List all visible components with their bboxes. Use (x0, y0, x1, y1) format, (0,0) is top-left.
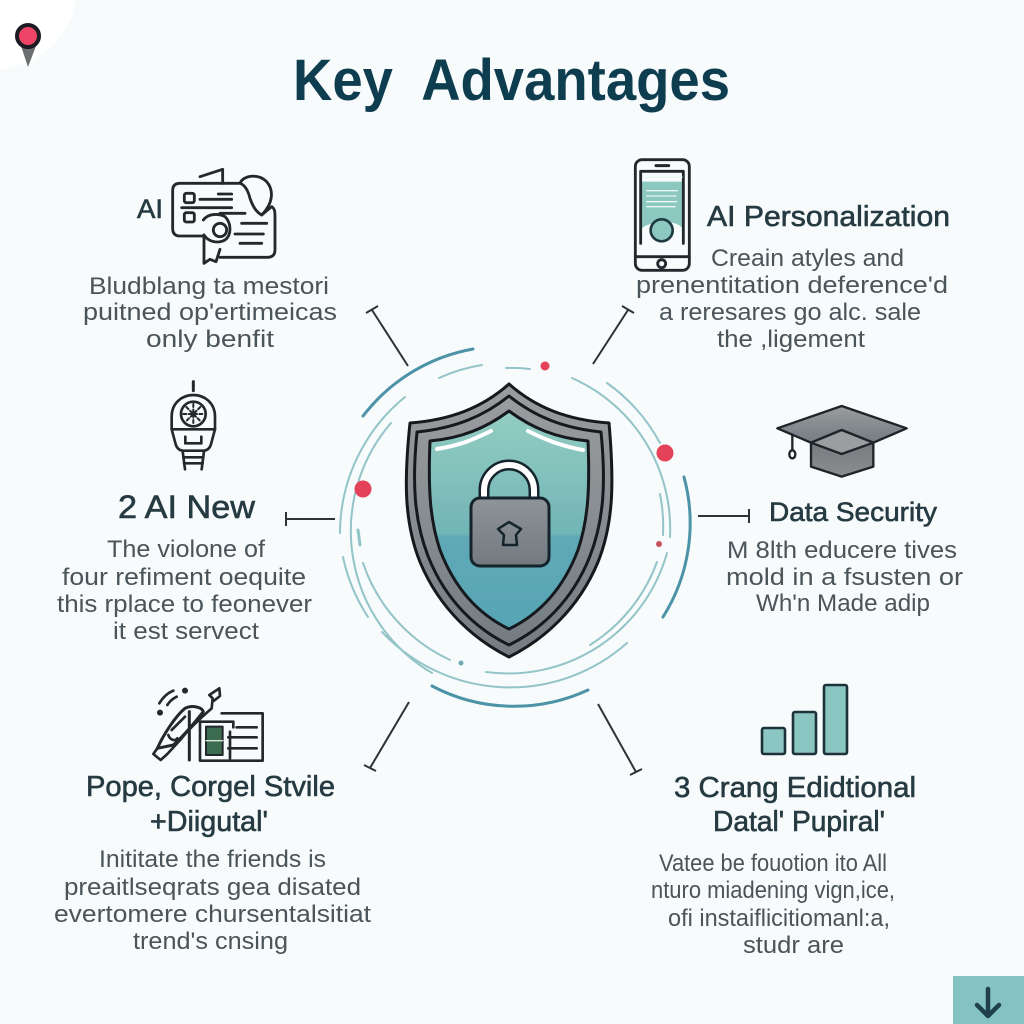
body text (636, 245, 948, 353)
connector arrows (286, 306, 749, 775)
padlock (471, 465, 549, 566)
heading: +Diigutal' (150, 806, 268, 838)
panel: top left benefit (83, 169, 337, 353)
icon: down arrow tile (953, 976, 1024, 1024)
body text: Wh'n Made adip (756, 590, 930, 617)
heading: 3 Crang Edidtional (674, 772, 916, 804)
body text: this rplace to feonever (57, 591, 312, 618)
body text: mold in a fsusten or (726, 564, 963, 591)
body text: The violone of (107, 536, 265, 563)
body text: evertomere chursentalsitiat (54, 901, 371, 928)
icon: map pin (17, 25, 39, 67)
accent dots (354, 362, 674, 666)
body text: Creain atyles and (711, 245, 904, 272)
panel: 3 Crang Edidtional (651, 685, 916, 959)
title: Key Advantages (293, 48, 730, 113)
body text: nturo miadening vign,ice, (651, 877, 895, 904)
body text (83, 273, 337, 353)
body text: four refiment oequite (62, 564, 306, 591)
heading: Pope, Corgel Stvile (86, 771, 335, 803)
body text: it est servect (113, 618, 259, 645)
panel: Pope, Corgel Stvile (54, 688, 371, 955)
icon: smartphone (635, 160, 689, 270)
icon: gauge capsule (172, 382, 215, 469)
icon: graduation cap (777, 406, 907, 477)
body text (54, 846, 371, 955)
heading: AI Personalization (707, 201, 950, 233)
body text: only benfit (146, 326, 274, 353)
body text: prenentitation deference'd (636, 272, 948, 299)
orbit rings (340, 349, 690, 706)
shield (406, 384, 612, 657)
panel: 2 AI New (57, 382, 312, 645)
heading: 2 AI New (118, 489, 256, 525)
heading: Datal' Pupiral' (713, 806, 885, 838)
heading (86, 771, 335, 838)
body text: Bludblang ta mestori (89, 273, 329, 300)
body text (651, 850, 895, 959)
body text: puitned op'ertimeicas (83, 299, 337, 326)
body text: trend's cnsing (133, 928, 288, 955)
heading: Data Security (769, 497, 938, 527)
body text: ofi instaiflicitiomanl:a, (668, 905, 890, 932)
body text: a reresares go alc. sale (659, 299, 921, 326)
body text: the ,ligement (717, 326, 865, 353)
icon: documents and certificate (173, 169, 275, 263)
body text (726, 537, 963, 617)
body text: Vatee be fouotion ito All (659, 850, 887, 877)
panel: Data Security (726, 406, 963, 617)
heading: AI (137, 194, 163, 224)
icon: bar chart (762, 685, 847, 754)
central shield graphic (340, 349, 690, 706)
icon: digital tool and chart (153, 688, 263, 761)
body text: M 8lth educere tives (727, 537, 957, 564)
body text: studr are (743, 932, 844, 959)
body text (57, 536, 312, 645)
body text: Inititate the friends is (99, 846, 326, 873)
panel: AI Personalization (635, 160, 950, 353)
heading (674, 772, 916, 838)
body text: preaitlseqrats gea disated (64, 874, 361, 901)
